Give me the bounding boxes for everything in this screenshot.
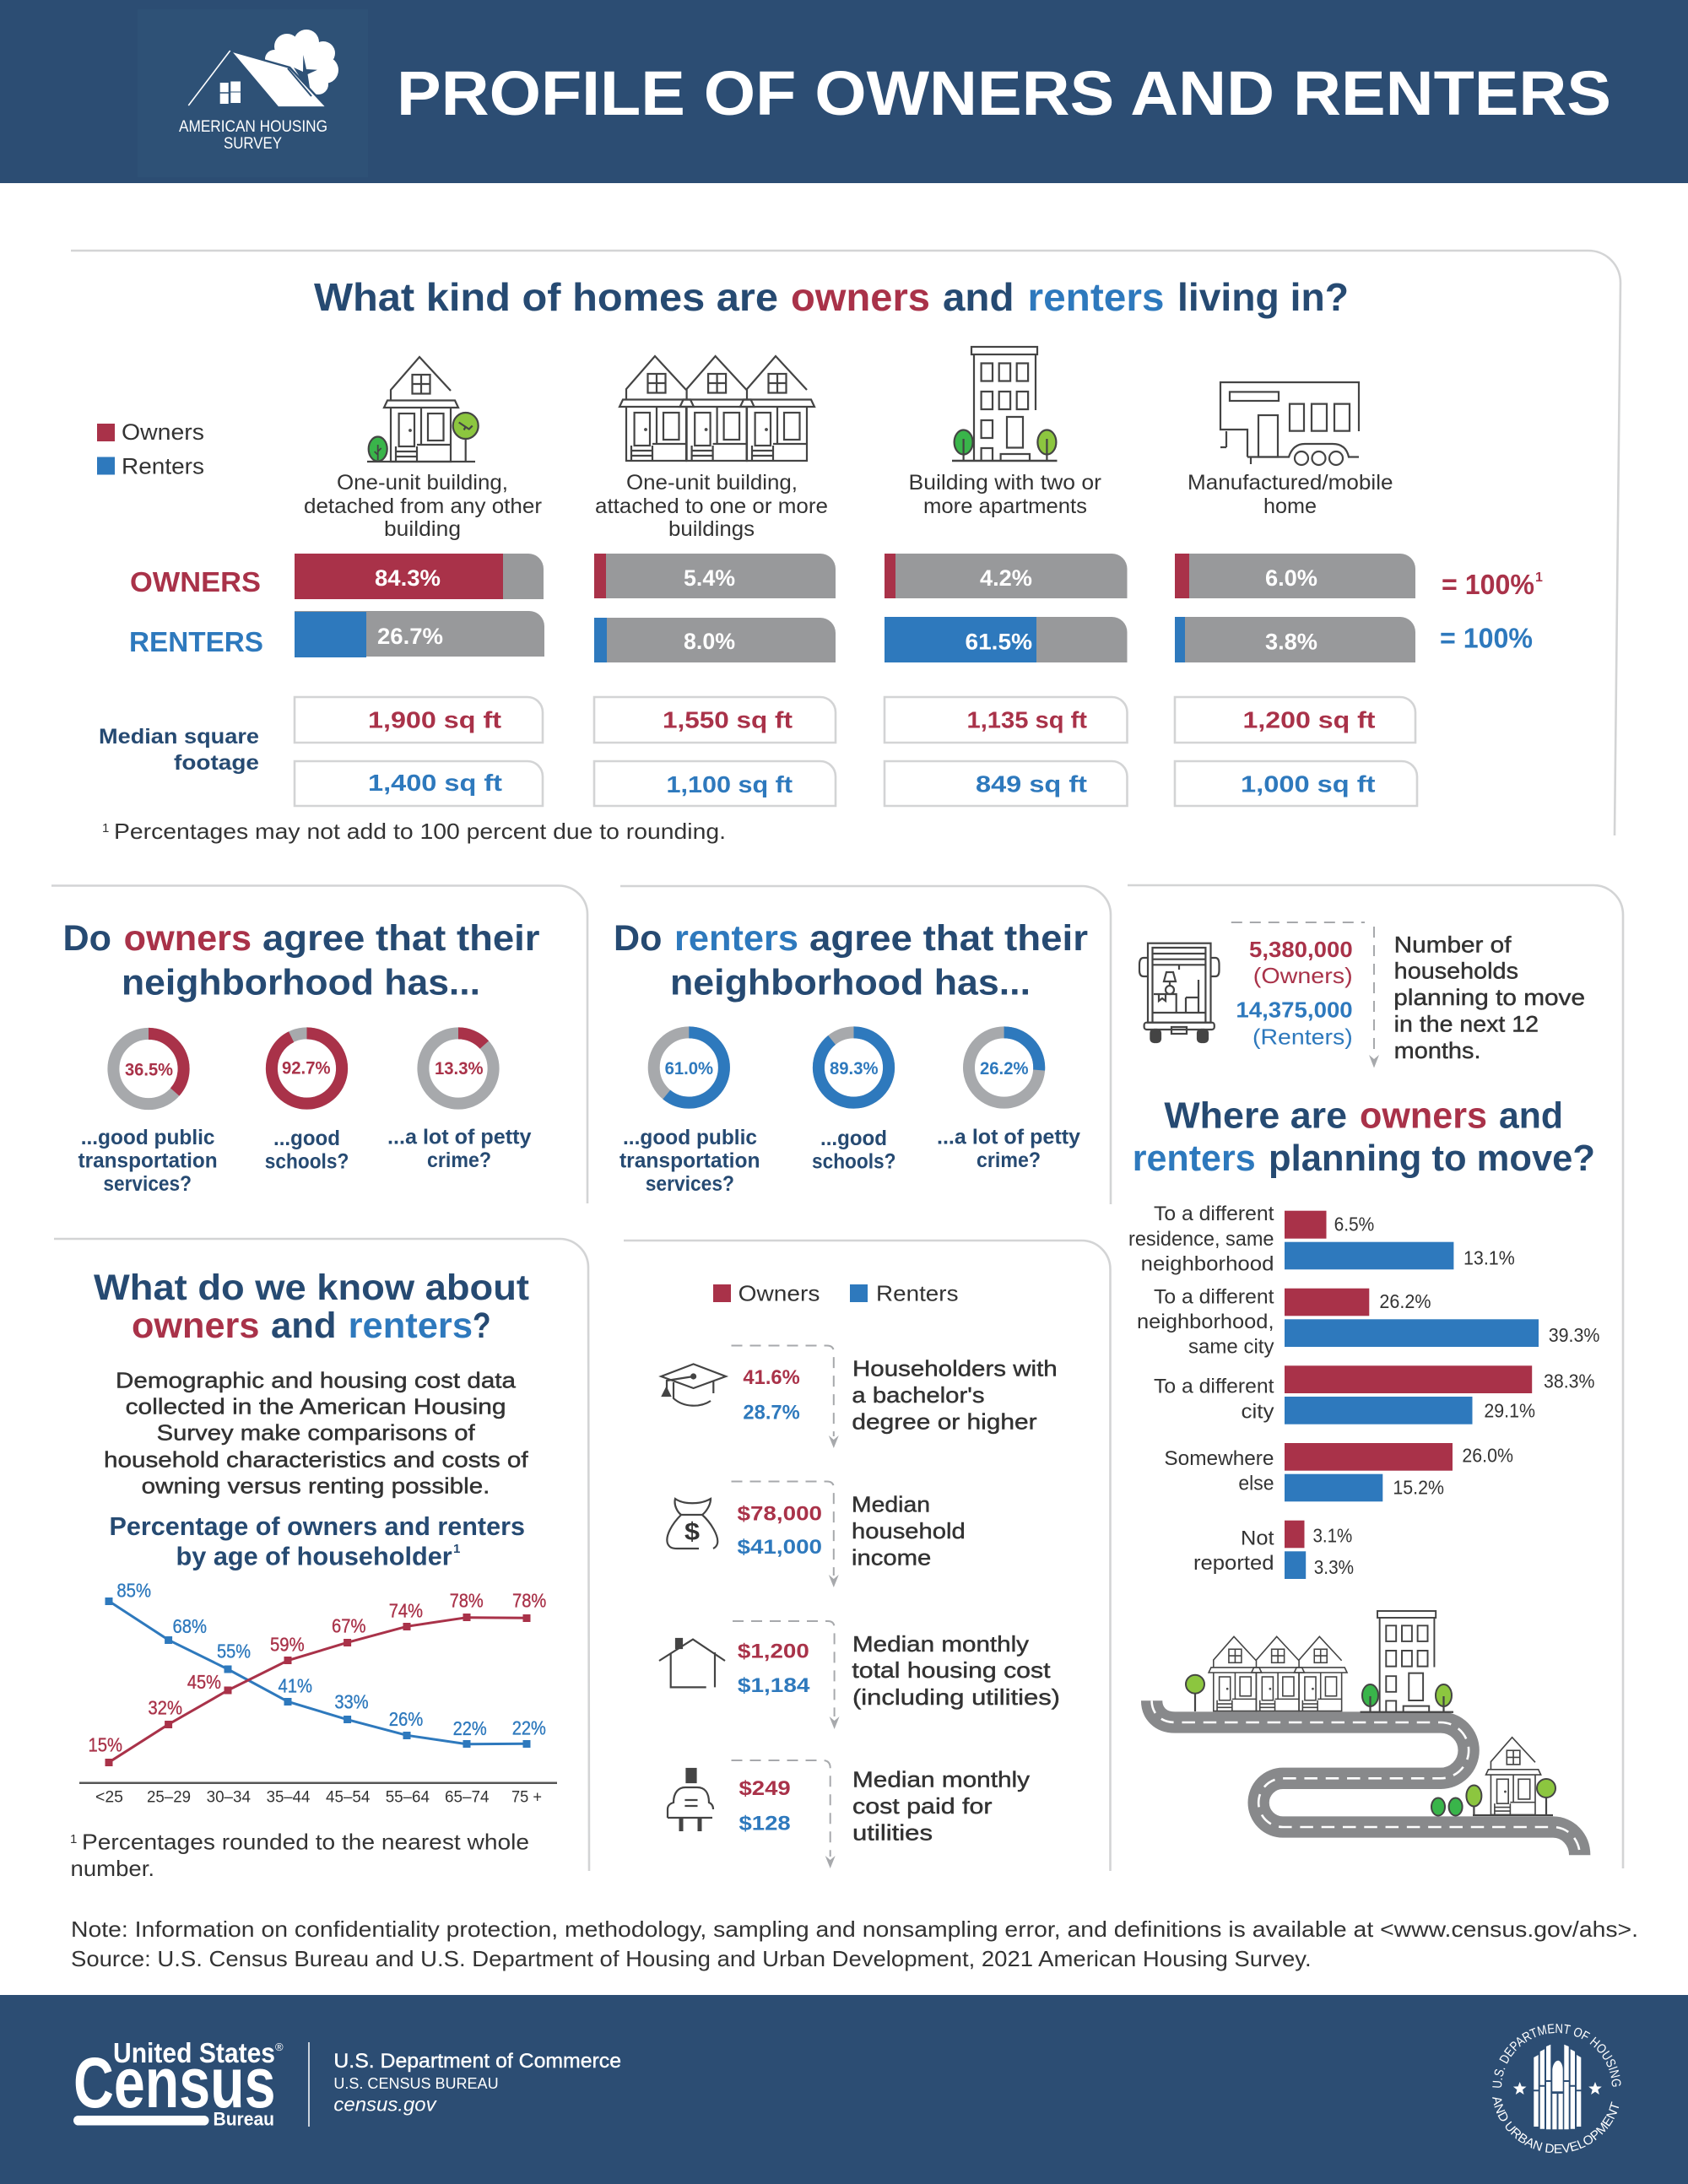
sq ft boxes: detached bbox=[295, 697, 543, 806]
heading: what do we know bbox=[94, 1268, 529, 1346]
bar: renters attached 8.0: 8.0% bbox=[684, 629, 735, 654]
donut: owners public transportation 36.5 bbox=[113, 1034, 184, 1104]
series: owners: 15% bbox=[88, 1734, 122, 1756]
footnote: percentages rounded: number. bbox=[71, 1856, 154, 1881]
chart title: by age of householder bbox=[110, 1511, 525, 1571]
donut: renters petty crime 26.2: 26.2% bbox=[980, 1059, 1029, 1078]
label: median square footage: Median square bbox=[99, 725, 259, 749]
bar values: 26.2% bbox=[1379, 1290, 1431, 1312]
bar: owners detached 84.3: 84.3% bbox=[375, 565, 441, 591]
heading: what do we know: renters bbox=[349, 1306, 473, 1346]
heading: do renters agree: neighborhood has... bbox=[670, 962, 1031, 1003]
caption: petty crime: ...a lot of petty bbox=[387, 1126, 532, 1149]
icon: money bag bbox=[667, 1499, 717, 1549]
labels: move destinations bbox=[1128, 1203, 1274, 1575]
panel: what kind of homes bbox=[71, 251, 1620, 844]
heading: what do we know: ? bbox=[473, 1306, 491, 1346]
labels: move destinations: reported bbox=[1193, 1552, 1274, 1575]
labels: move destinations: residence, same bbox=[1128, 1228, 1274, 1251]
caption: apartments: Building with two or bbox=[908, 471, 1101, 495]
row: household income: household bbox=[852, 1518, 966, 1543]
logo: American Housing Survey bbox=[138, 9, 368, 177]
seal: Department of Housing and Urban Development: U.S. DEPARTMENT OF HOUSING bbox=[1492, 2024, 1620, 2088]
row: total housing cost: $1,200 bbox=[738, 1641, 809, 1662]
row: utilities cost: $128 bbox=[739, 1813, 791, 1835]
bar chart: where planning to move bbox=[1128, 1203, 1600, 1579]
sq ft boxes: apartments bbox=[885, 697, 1128, 806]
bar: owners attached 5.4: 5.4% bbox=[684, 565, 735, 591]
sq ft boxes: mobile home bbox=[1175, 697, 1417, 806]
heading: what do we know: What do we know about bbox=[94, 1268, 529, 1308]
title: PROFILE OF OWNERS AND RENTERS bbox=[397, 58, 1611, 128]
series: owners: 59% bbox=[270, 1634, 305, 1656]
bar values: 3.1% bbox=[1313, 1524, 1352, 1546]
text block: demographic data description: household characteristics and costs of bbox=[104, 1446, 528, 1472]
caption: apartments: more apartments bbox=[923, 495, 1087, 518]
heading: do renters agree: Do bbox=[614, 918, 662, 959]
caption: public transportation: transportation bbox=[78, 1149, 218, 1173]
donut: owners petty crime 13.3 bbox=[423, 1033, 494, 1104]
row: total housing cost: (including utilities) bbox=[852, 1684, 1060, 1710]
sq ft boxes: attached: 1,550 sq ft bbox=[663, 707, 793, 733]
bar values: 6.5% bbox=[1334, 1213, 1374, 1235]
icon: manufactured mobile home bbox=[1220, 382, 1359, 465]
callout: number of households planning to move: planning to move bbox=[1393, 985, 1585, 1010]
series: renters: 33% bbox=[334, 1691, 369, 1713]
heading: where are owners and renters planning to move: and bbox=[1499, 1095, 1563, 1136]
icon: moving truck bbox=[1139, 943, 1219, 1042]
caption: good schools bbox=[265, 1127, 349, 1173]
icon: money bag: $ bbox=[684, 1518, 700, 1546]
bar: owners mobile 6.0 bbox=[1175, 554, 1415, 598]
heading: where are owners and renters planning to move bbox=[1133, 1095, 1595, 1179]
line chart: owners and renters by age bbox=[79, 1579, 557, 1807]
label: median square footage: footage bbox=[174, 751, 259, 775]
donut: renters petty crime 26.2 bbox=[969, 1032, 1039, 1103]
heading: do owners agree: owners bbox=[124, 918, 252, 959]
heading: do owners agree bbox=[62, 918, 540, 1003]
callout: number of households planning to move: (Renters) bbox=[1252, 1024, 1353, 1049]
bars: renters bbox=[1285, 1242, 1539, 1579]
caption: attached: attached to one or more bbox=[595, 495, 828, 518]
logo: American Housing Survey: SURVEY bbox=[224, 135, 282, 153]
caption: public transportation: services? bbox=[646, 1172, 734, 1196]
caption: detached bbox=[304, 471, 542, 541]
row: household income: $41,000 bbox=[738, 1536, 822, 1559]
bars: owners bbox=[1285, 1211, 1532, 1548]
panel: planning to move bbox=[1128, 885, 1623, 1868]
callout: number of households planning to move: (Owners) bbox=[1253, 963, 1353, 988]
callout: number of households planning to move: in the next 12 bbox=[1394, 1012, 1539, 1037]
caption: apartments bbox=[908, 471, 1101, 518]
row: household income: $78,000 bbox=[738, 1502, 822, 1526]
heading: do owners agree: Do bbox=[62, 918, 111, 959]
labels: move destinations: To a different bbox=[1154, 1285, 1274, 1308]
sq ft boxes: attached: 1,100 sq ft bbox=[667, 771, 793, 797]
note and source: Source: U.S. Census Bureau and U.S. Department of Housing and Urban Development, 2021 American Housing Survey. bbox=[71, 1946, 1312, 1971]
bar values: 39.3% bbox=[1549, 1324, 1600, 1346]
axis labels: age groups: 75 + bbox=[511, 1789, 542, 1807]
donut: owners public transportation 36.5: 36.5% bbox=[125, 1060, 173, 1080]
bar: owners attached 5.4 bbox=[594, 554, 836, 598]
row: bachelor's degree bbox=[661, 1345, 1058, 1448]
row label: renters: RENTERS bbox=[129, 626, 263, 657]
bar values: 3.3% bbox=[1314, 1556, 1354, 1578]
callout: number of households planning to move: Number of bbox=[1394, 932, 1512, 957]
panel: do owners agree bbox=[51, 886, 587, 1203]
heading: what kind of homes: and bbox=[943, 275, 1014, 319]
text: agency names: U.S. CENSUS BUREAU bbox=[333, 2075, 499, 2092]
bar values: 13.1% bbox=[1463, 1246, 1515, 1268]
bar: renters detached 26.7: 26.7% bbox=[377, 624, 443, 649]
callout: number of households planning to move: households bbox=[1394, 958, 1518, 983]
donut: owners petty crime 13.3: 13.3% bbox=[435, 1059, 484, 1078]
bar: renters mobile 3.8 bbox=[1175, 617, 1415, 662]
seal: Department of Housing and Urban Development bbox=[1492, 2024, 1620, 2154]
donut: renters schools 89.3 bbox=[819, 1032, 889, 1103]
sq ft boxes: detached: 1,900 sq ft bbox=[368, 707, 501, 733]
heading: what kind of homes: What kind of homes are bbox=[314, 275, 778, 319]
logo: United States Census Bureau: United States bbox=[113, 2037, 275, 2068]
caption: attached: buildings bbox=[668, 517, 755, 541]
labels: move destinations: Not bbox=[1241, 1527, 1274, 1550]
caption: good schools: ...good bbox=[820, 1127, 887, 1150]
footer band bbox=[0, 1995, 1688, 2184]
heading: where are owners and renters planning to move: owners bbox=[1360, 1095, 1487, 1136]
series: owners: 32% bbox=[148, 1697, 182, 1719]
bar: owners mobile 6.0: 6.0% bbox=[1265, 565, 1317, 591]
caption: public transportation bbox=[619, 1126, 760, 1196]
series: owners: 67% bbox=[332, 1615, 366, 1637]
caption: good schools: ...good bbox=[273, 1127, 340, 1150]
bar: renters mobile 3.8: 3.8% bbox=[1265, 630, 1317, 655]
heading: what kind of homes: renters bbox=[1028, 275, 1165, 319]
row: utilities cost: $249 bbox=[739, 1777, 791, 1800]
bar: owners apartments 4.2 bbox=[885, 554, 1128, 598]
heading: what do we know: owners bbox=[132, 1306, 259, 1346]
heading: do renters agree: agree that their bbox=[809, 918, 1088, 959]
row: utilities cost: Median monthly bbox=[852, 1766, 1030, 1792]
legend: owners and renters: Renters bbox=[876, 1281, 959, 1306]
caption: petty crime bbox=[937, 1126, 1080, 1172]
heading: where are owners and renters planning to move: planning to move? bbox=[1269, 1138, 1595, 1179]
legend: owners and renters: Renters bbox=[122, 454, 204, 479]
heading: where are owners and renters planning to move: renters bbox=[1133, 1138, 1256, 1179]
caption: public transportation: ...good public bbox=[81, 1126, 215, 1149]
legend: owners and renters: Owners bbox=[122, 419, 204, 445]
sq ft boxes: mobile home: 1,200 sq ft bbox=[1242, 707, 1376, 733]
text block: demographic data description: Demographic and housing cost data bbox=[116, 1367, 517, 1392]
caption: attached: One-unit building, bbox=[626, 471, 798, 495]
text: agency names: U.S. Department of Commerce bbox=[333, 2050, 621, 2073]
caption: petty crime bbox=[387, 1126, 532, 1172]
bar values bbox=[1313, 1213, 1600, 1578]
chart title: by age of householder: Percentage of owners and renters bbox=[110, 1511, 525, 1541]
bar: renters detached 26.7 bbox=[295, 611, 544, 657]
labels: move destinations: neighborhood, bbox=[1137, 1311, 1274, 1333]
bar: owners apartments 4.2: 4.2% bbox=[980, 565, 1032, 591]
caption: petty crime: ...a lot of petty bbox=[937, 1126, 1080, 1149]
bar: renters apartments 61.5: 61.5% bbox=[966, 630, 1032, 655]
labels: move destinations: To a different bbox=[1154, 1203, 1274, 1225]
bar: renters attached 8.0 bbox=[594, 618, 836, 662]
caption: public transportation: transportation bbox=[619, 1149, 760, 1173]
sq ft boxes: attached bbox=[594, 697, 836, 806]
donut: renters public transportation 61.0 bbox=[654, 1032, 724, 1103]
callout: number of households planning to move bbox=[1231, 922, 1585, 1068]
row: household income bbox=[667, 1482, 966, 1587]
labels: move destinations: else bbox=[1238, 1473, 1274, 1495]
caption: petty crime: crime? bbox=[427, 1149, 491, 1172]
heading: what do we know: and bbox=[271, 1306, 337, 1346]
caption: detached: building bbox=[384, 517, 461, 541]
sq ft boxes: apartments: 1,135 sq ft bbox=[967, 707, 1087, 733]
axis labels: age groups: 45–54 bbox=[326, 1789, 371, 1807]
caption: mobile home: home bbox=[1263, 495, 1317, 518]
caption: mobile home bbox=[1188, 471, 1393, 518]
icon: attached row houses bbox=[619, 356, 814, 461]
footnote: percentages rounded: 1 bbox=[70, 1832, 77, 1846]
series: owners: 45% bbox=[187, 1671, 221, 1693]
heading: what kind of homes: owners bbox=[791, 275, 930, 319]
callout: number of households planning to move: 5,380,000 bbox=[1249, 937, 1353, 962]
row: utilities cost: utilities bbox=[852, 1819, 933, 1845]
sq ft boxes: detached: 1,400 sq ft bbox=[368, 770, 502, 796]
series: renters: 26% bbox=[389, 1708, 423, 1730]
icon: house outline bbox=[659, 1639, 725, 1687]
axis labels: age groups bbox=[95, 1789, 542, 1807]
donut: renters schools 89.3: 89.3% bbox=[830, 1059, 879, 1078]
axis labels: age groups: <25 bbox=[95, 1789, 123, 1807]
row: utilities cost bbox=[668, 1760, 1030, 1868]
footnote: percentages rounded: Percentages rounded to the nearest whole bbox=[82, 1830, 529, 1855]
series: renters bbox=[105, 1579, 546, 1748]
total: renters 100 percent: = 100% bbox=[1440, 623, 1533, 653]
callout: number of households planning to move: 14,375,000 bbox=[1236, 997, 1353, 1023]
caption: mobile home: Manufactured/mobile bbox=[1188, 471, 1393, 495]
logo: United States Census Bureau: Census bbox=[73, 2043, 275, 2122]
row: bachelor's degree: Householders with bbox=[852, 1355, 1058, 1381]
row: bachelor's degree: 41.6% bbox=[743, 1366, 800, 1389]
row: bachelor's degree: degree or higher bbox=[852, 1409, 1037, 1435]
chart title: by age of householder: by age of householder bbox=[176, 1541, 452, 1571]
heading: what kind of homes bbox=[314, 275, 1349, 319]
panel: do renters agree bbox=[614, 886, 1111, 1204]
note and source: Note: Information on confidentiality protection, methodology, sampling and nonsampling error, and definitions is available at <www.census.gov/ahs>. bbox=[71, 1916, 1638, 1942]
icon: graduation cap bbox=[661, 1364, 726, 1406]
footnote: percentages rounded bbox=[70, 1830, 529, 1881]
text block: demographic data description: Survey make comparisons of bbox=[157, 1420, 475, 1446]
note and source bbox=[71, 1916, 1638, 1971]
series: renters: 22% bbox=[453, 1717, 487, 1739]
legend: owners and renters: Owners bbox=[738, 1281, 820, 1306]
axis labels: age groups: 35–44 bbox=[267, 1789, 311, 1807]
donut: renters public transportation 61.0: 61.0% bbox=[665, 1059, 713, 1078]
header band bbox=[0, 0, 1688, 183]
series: renters: 85% bbox=[116, 1579, 151, 1601]
text block: demographic data description: collected in the American Housing bbox=[126, 1394, 506, 1419]
caption: detached: detached from any other bbox=[304, 495, 542, 518]
labels: move destinations: Somewhere bbox=[1164, 1447, 1274, 1470]
caption: good schools bbox=[812, 1127, 896, 1173]
chart title: by age of householder: 1 bbox=[453, 1542, 460, 1556]
row: total housing cost: total housing cost bbox=[852, 1657, 1051, 1683]
label: median square footage bbox=[99, 725, 259, 775]
text: agency names bbox=[333, 2050, 621, 2115]
row label: owners: OWNERS bbox=[130, 566, 261, 597]
caption: public transportation: ...good public bbox=[623, 1126, 757, 1149]
icon: detached house bbox=[367, 357, 479, 462]
series: renters: 22% bbox=[512, 1716, 546, 1738]
axis labels: age groups: 25–29 bbox=[147, 1789, 191, 1807]
icon: electric plug bbox=[668, 1769, 713, 1831]
total: owners 100 percent: = 100% bbox=[1442, 569, 1534, 600]
footnote: rounding: Percentages may not add to 100 percent due to rounding. bbox=[114, 819, 726, 844]
series: owners: 78% bbox=[450, 1590, 484, 1612]
bar values: 15.2% bbox=[1393, 1477, 1444, 1499]
heading: what kind of homes: living in? bbox=[1177, 275, 1349, 319]
text block: demographic data description: owning versus renting possible. bbox=[142, 1473, 490, 1498]
panel: household comparison bbox=[624, 1241, 1111, 1871]
logo: United States Census Bureau: ® bbox=[275, 2041, 284, 2053]
heading: where are owners and renters planning to move: Where are bbox=[1164, 1095, 1347, 1136]
bar: renters apartments 61.5 bbox=[885, 617, 1128, 662]
labels: move destinations: neighborhood bbox=[1141, 1252, 1274, 1275]
series: owners: 78% bbox=[512, 1590, 546, 1612]
caption: detached: One-unit building, bbox=[337, 471, 508, 495]
row: household income: income bbox=[852, 1544, 931, 1570]
series: renters: 55% bbox=[217, 1640, 251, 1662]
row: bachelor's degree: 28.7% bbox=[743, 1401, 800, 1424]
bar values: 26.0% bbox=[1462, 1445, 1513, 1467]
heading: do renters agree: renters bbox=[674, 918, 798, 959]
labels: move destinations: To a different bbox=[1154, 1376, 1274, 1398]
row: total housing cost: $1,184 bbox=[738, 1674, 810, 1697]
series: renters: 68% bbox=[172, 1615, 207, 1637]
labels: move destinations: city bbox=[1241, 1401, 1274, 1424]
series: renters: 41% bbox=[279, 1675, 312, 1697]
donut: owners schools 92.7 bbox=[272, 1033, 342, 1104]
caption: good schools: schools? bbox=[812, 1149, 896, 1173]
series: owners bbox=[88, 1590, 546, 1766]
caption: good schools: schools? bbox=[265, 1149, 349, 1173]
legend: owners and renters bbox=[713, 1281, 959, 1306]
caption: petty crime: crime? bbox=[977, 1149, 1041, 1172]
bar values: 38.3% bbox=[1544, 1370, 1594, 1392]
axis labels: age groups: 55–64 bbox=[386, 1789, 430, 1807]
heading: do renters agree bbox=[614, 918, 1088, 1003]
bar values: 29.1% bbox=[1484, 1399, 1535, 1421]
legend: owners and renters bbox=[97, 419, 204, 479]
callout: number of households planning to move: months. bbox=[1394, 1038, 1480, 1063]
row: total housing cost: Median monthly bbox=[852, 1631, 1029, 1657]
bar: owners detached 84.3 bbox=[295, 554, 544, 599]
row: bachelor's degree: a bachelor's bbox=[852, 1382, 984, 1408]
labels: move destinations: same city bbox=[1188, 1335, 1274, 1358]
donut: owners schools 92.7: 92.7% bbox=[282, 1058, 331, 1078]
caption: public transportation bbox=[78, 1126, 218, 1196]
icon: apartment building bbox=[952, 347, 1057, 461]
footnote: rounding: 1 bbox=[102, 821, 109, 835]
illustration: winding road with homes bbox=[1152, 1611, 1580, 1855]
axis labels: age groups: 30–34 bbox=[207, 1789, 251, 1807]
text block: demographic data description bbox=[104, 1367, 528, 1498]
panel: what do we know bbox=[54, 1239, 589, 1881]
logo: American Housing Survey: AMERICAN HOUSING bbox=[179, 118, 327, 136]
total: owners 100 percent: 1 bbox=[1535, 570, 1543, 585]
caption: attached bbox=[595, 471, 828, 541]
row: household income: Median bbox=[852, 1492, 930, 1517]
seal: Department of Housing and Urban Development: AND URBAN DEVELOPMENT bbox=[1492, 2097, 1619, 2154]
axis labels: age groups: 65–74 bbox=[445, 1789, 490, 1807]
row: utilities cost: cost paid for bbox=[852, 1793, 993, 1819]
sq ft boxes: apartments: 849 sq ft bbox=[976, 771, 1087, 797]
series: owners: 74% bbox=[389, 1600, 423, 1622]
row: total housing cost bbox=[659, 1621, 1060, 1729]
caption: public transportation: services? bbox=[103, 1172, 192, 1196]
heading: do owners agree: neighborhood has... bbox=[122, 962, 480, 1003]
sq ft boxes: mobile home: 1,000 sq ft bbox=[1241, 771, 1376, 797]
heading: do owners agree: agree that their bbox=[262, 918, 540, 959]
logo: United States Census Bureau: Bureau bbox=[213, 2108, 274, 2130]
text: agency names: census.gov bbox=[333, 2093, 437, 2115]
